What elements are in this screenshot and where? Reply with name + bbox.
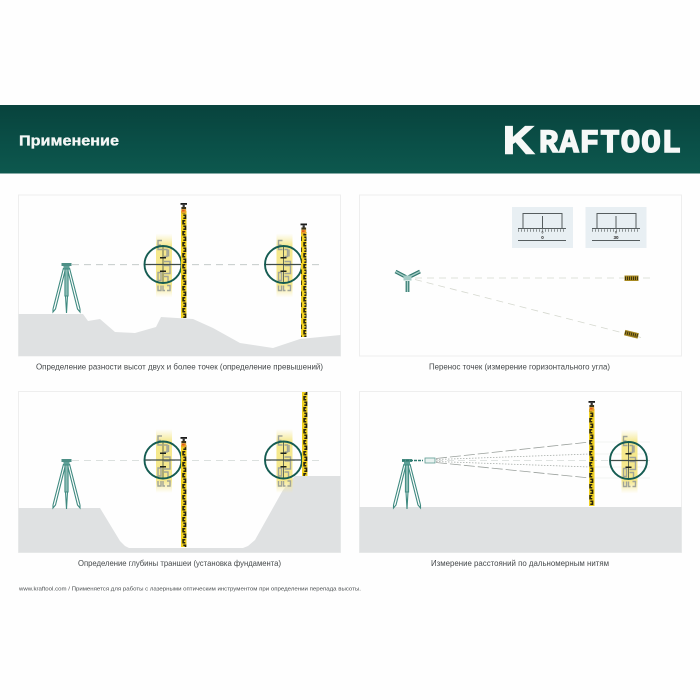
icon: tripod top view	[396, 272, 420, 292]
leveling rod 1	[180, 203, 187, 318]
panel: trench depth	[18, 392, 340, 552]
caption: panel 3: Определение глубины траншеи (установка фундамента)	[78, 558, 281, 568]
icon: tripod level	[53, 459, 80, 509]
scope view 1	[144, 429, 182, 493]
scope view	[610, 430, 648, 494]
sight lines	[415, 278, 654, 338]
leveling rod 1	[180, 437, 187, 547]
reading box 0: 0	[541, 235, 544, 240]
ground with trench	[18, 476, 340, 552]
reading box 30: 30	[613, 235, 619, 240]
leveling rod 2	[300, 224, 307, 337]
icon: tripod level	[53, 263, 80, 313]
ground terrain	[18, 314, 340, 356]
logo: KRAFTOOL: K	[503, 120, 534, 162]
logo: KRAFTOOL	[503, 120, 681, 162]
panel: point transfer	[360, 195, 682, 356]
icon: tripod with telescope	[394, 458, 435, 509]
caption: panel 2: Перенос точек (измерение горизонтального угла)	[429, 362, 610, 372]
panel: height difference between points	[18, 195, 340, 356]
scope view 1	[144, 234, 182, 298]
reading box 0: 0	[542, 230, 544, 234]
rod top view 1	[624, 276, 638, 281]
header band	[0, 105, 700, 174]
panel: stadia distance measurement	[360, 392, 682, 552]
sight line	[72, 264, 320, 266]
stadia cone lines	[436, 442, 650, 478]
sight line	[72, 460, 320, 462]
leveling rod	[588, 401, 595, 506]
title: Применение	[19, 132, 119, 150]
scope view 2	[264, 234, 302, 298]
caption: panel 4: Измерение расстояний по дальномерным нитям	[431, 558, 609, 568]
rod top view 2	[624, 330, 639, 339]
ground	[360, 507, 682, 552]
reading box 30: 0	[615, 230, 617, 234]
reading box 30	[586, 207, 646, 248]
logo: KRAFTOOL: RAFTOOL	[539, 125, 681, 162]
leveling rod 2	[302, 392, 308, 476]
caption: panel 1: Определение разности высот двух и более точек (определение превышений)	[36, 362, 323, 372]
scope view 2	[264, 429, 302, 493]
reading box 0	[512, 207, 573, 248]
footer note: www.kraftool.com / Применяется для работы с лазерными оптическим инструментом при определении перепада высоты.	[18, 586, 361, 592]
